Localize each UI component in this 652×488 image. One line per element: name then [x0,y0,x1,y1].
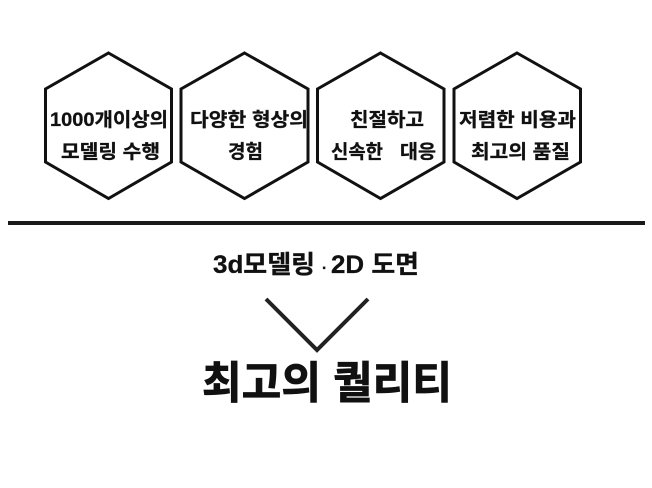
hexagon: low cost, best quality: 최고의 품질 [471,141,570,163]
main heading: 최고의 퀄리티 [202,359,452,408]
hexagon: friendly and fast response: 친절하고 [350,109,424,131]
subtitle: · [322,260,327,277]
arrow: downward chevron [266,299,368,350]
hexagon: low cost, best quality: 저렴한 비용과 [459,109,576,131]
subtitle [213,251,419,279]
hexagon: 1000+ models: 모델링 수행 [61,141,160,163]
hexagon: diverse shapes: 다양한 형상의 [190,109,308,131]
hexagon: friendly and fast response: 대응 [400,141,436,163]
hexagon: friendly and fast response [318,53,444,198]
hexagon: 1000+ models [46,53,172,198]
hexagon: diverse shapes: 경험 [228,141,263,163]
divider line [8,221,645,225]
hexagon: diverse shapes [181,53,308,198]
hexagon: friendly and fast response: 신속한 [331,141,383,163]
hexagon: 1000+ models: 1000개이상의 [50,109,168,131]
subtitle: 3d모델링 [213,251,315,279]
hexagon: low cost, best quality [454,53,580,198]
subtitle: 2D 도면 [331,251,419,279]
